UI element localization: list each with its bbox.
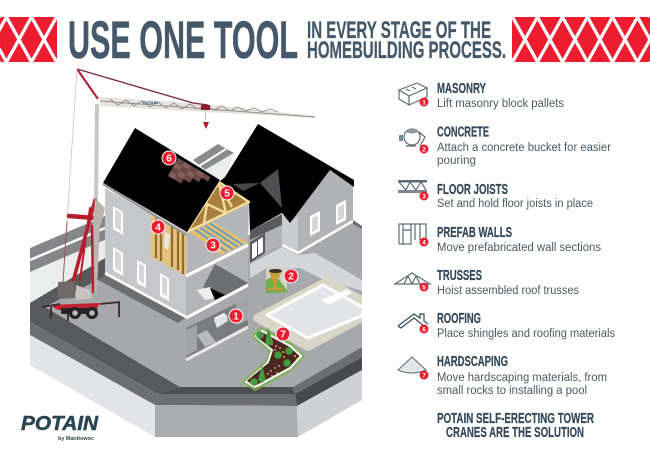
step markers on illustration: [151, 151, 298, 341]
marker 5: [220, 186, 234, 200]
title: USE ONE TOOL: [68, 11, 298, 70]
item: prefab walls: [399, 224, 601, 254]
upper room cutaway: [187, 202, 249, 275]
icon: joist: 3: [422, 194, 426, 200]
marker 7: [276, 327, 290, 341]
item: concrete: pouring: [437, 155, 476, 167]
marker 2: [284, 269, 298, 283]
marker 5: 5: [224, 188, 230, 200]
item: masonry: MASONRY: [437, 81, 486, 97]
front house windows: [113, 206, 169, 301]
title: HOMEBUILDING PROCESS.: [307, 37, 506, 64]
front house wall: [105, 188, 187, 317]
item: concrete: [399, 124, 611, 167]
icon: roof: [398, 314, 428, 334]
item: concrete: Attach a concrete bucket for easier: [437, 142, 611, 154]
front roof: [103, 128, 220, 232]
crane tie lines: [77, 69, 193, 103]
item: prefab walls: Move prefabricated wall sections: [437, 242, 601, 254]
marker 6: [162, 151, 176, 165]
patio door: [250, 233, 265, 263]
item: hardscaping: HARDSCAPING: [437, 354, 508, 370]
left road: [30, 216, 105, 303]
icon: concrete bucket: 2: [422, 146, 426, 154]
marker 2: 2: [288, 272, 294, 282]
marker 3: 3: [210, 240, 216, 252]
item: trusses: Hoist assembled roof trusses: [437, 285, 579, 297]
item: hardscaping: Move hardscaping materials, from: [437, 372, 607, 384]
patio tiles: [250, 247, 362, 291]
item: hardscaping: [398, 354, 607, 397]
icon: wall frame: 4: [422, 240, 426, 246]
icon: truss: 5: [422, 284, 426, 292]
icon: block: [399, 83, 428, 106]
wall shadow: [98, 275, 185, 323]
crane lower mast: [91, 222, 100, 292]
marker 3: [206, 238, 220, 252]
marker 1: 1: [233, 312, 239, 322]
item: floor joists: Set and hold floor joists in place: [437, 198, 593, 210]
garden: [243, 327, 304, 390]
platform front faces: [30, 322, 362, 437]
item: hardscaping: small rocks to installing a pool: [437, 385, 587, 397]
concrete bucket: [266, 267, 288, 293]
icon: concrete bucket: [399, 128, 428, 154]
icon: joist: [398, 180, 428, 200]
item: floor joists: FLOOR JOISTS: [437, 182, 508, 198]
marker 4: 4: [155, 222, 161, 234]
item: roofing: Place shingles and roofing materials: [437, 328, 615, 340]
ground floor room: [186, 245, 248, 318]
crane jib: [100, 97, 315, 118]
floor joists: [190, 222, 248, 255]
item: floor joists: [398, 180, 593, 210]
back road: [193, 144, 234, 178]
icon: roof: 6: [422, 326, 426, 334]
icon: wall frame: [399, 224, 428, 246]
icon: rock pile: 7: [422, 372, 426, 380]
shingles: [168, 158, 210, 184]
logo: by Manitowoc: [58, 436, 94, 442]
back house windows: [310, 200, 346, 236]
closing statement: CRANES ARE THE SOLUTION: [446, 425, 584, 441]
marker 4: [151, 220, 165, 234]
ground surface: [45, 222, 362, 387]
isometric site illustration: [30, 69, 366, 437]
marker 1: [229, 309, 243, 323]
back house: [219, 124, 362, 263]
item: roofing: ROOFING: [437, 311, 481, 327]
prefab wall framing: [151, 213, 186, 276]
pool: [257, 281, 366, 347]
title: IN EVERY STAGE OF THE: [307, 17, 491, 44]
crane: [42, 69, 315, 321]
crane jib: POTAIN: [143, 100, 158, 105]
asphalt band: [30, 258, 180, 394]
crane mast: [94, 104, 99, 205]
basement with block pallets: [186, 298, 248, 360]
item: masonry: [399, 81, 564, 110]
header band: left red lattice: [0, 17, 57, 62]
crane ballast box: [58, 281, 75, 299]
item: concrete: CONCRETE: [437, 124, 489, 140]
item: roofing: [398, 311, 615, 340]
roof truss: [187, 182, 249, 232]
icon: block: 1: [422, 100, 426, 106]
crane lower arms: [63, 200, 95, 292]
crane trolley and hook: [201, 105, 210, 129]
item: trusses: [395, 268, 579, 297]
icon: truss: [395, 273, 430, 292]
item: prefab walls: PREFAB WALLS: [437, 225, 512, 241]
item: trusses: TRUSSES: [437, 268, 482, 284]
item: masonry: Lift masonry block pallets: [437, 98, 564, 110]
marker 6: 6: [166, 154, 172, 164]
closing statement: [437, 411, 594, 441]
icon: rock pile: [398, 357, 428, 380]
marker 7: 7: [280, 330, 286, 340]
header band: right red lattice: [512, 17, 650, 62]
logo: POTAIN: [21, 413, 99, 435]
crane trailer: [42, 302, 120, 321]
